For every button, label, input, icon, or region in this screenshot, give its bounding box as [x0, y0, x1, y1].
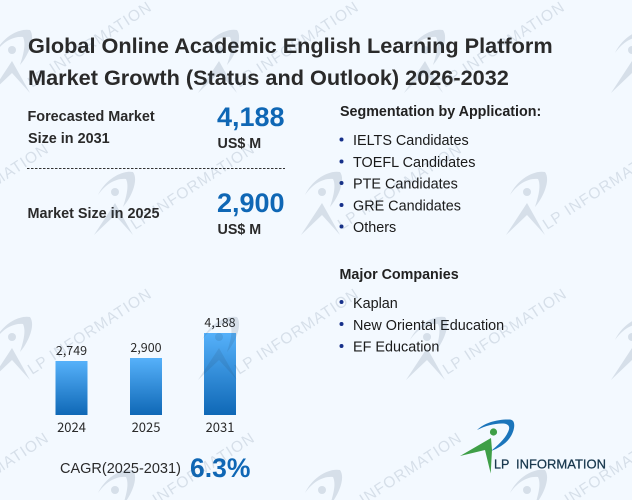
segmentation list: PTE Candidates: [353, 176, 458, 192]
segmentation list: IELTS Candidates: [353, 133, 469, 149]
segmentation list: GRE Candidates: [353, 198, 461, 214]
panel: segmentation by application: [340, 104, 541, 236]
text: LP INFORMATION: [25, 285, 155, 378]
bar 2031: [204, 312, 236, 436]
companies list: [340, 296, 504, 356]
logo: LP Information: [460, 419, 606, 474]
forecasted market size value: 4,188: [217, 102, 285, 132]
CAGR callout: [60, 453, 250, 483]
bar 2024: 2,749: [56, 340, 87, 359]
logo wordmark: INFORMATION: [516, 458, 606, 472]
bar 2024: [56, 340, 88, 436]
text: LP INFORMATION: [335, 140, 465, 233]
title: Global Online Academic English Learning Platform: [28, 33, 553, 58]
text: LP INFORMATION: [232, 0, 362, 91]
bar 2031: 2031: [206, 417, 234, 436]
bar chart: [56, 312, 236, 436]
segmentation heading: Segmentation by Application:: [340, 104, 541, 120]
text: LP INFORMATION: [440, 285, 570, 378]
companies list: EF Education: [353, 340, 439, 356]
panel: market size stats: [27, 102, 285, 238]
forecasted market size value: US$ M: [218, 136, 261, 152]
text: LP INFORMATION: [128, 140, 258, 233]
bar 2025: [130, 337, 162, 436]
CAGR callout: CAGR(2025-2031): [60, 461, 181, 477]
icon: logo dot: [490, 428, 497, 436]
forecasted market size label: Size in 2031: [28, 131, 110, 147]
title: [28, 33, 553, 90]
bar 2025: 2025: [132, 417, 160, 436]
logo wordmark: LP: [494, 458, 509, 472]
forecasted market size value: [217, 102, 285, 152]
market size 2025 value: US$ M: [218, 222, 261, 238]
segmentation list: Others: [353, 220, 396, 236]
text: LP INFORMATION: [438, 0, 568, 91]
segmentation list: TOEFL Candidates: [353, 155, 475, 171]
forecasted market size label: Forecasted Market: [28, 109, 155, 125]
panel: major companies: [340, 267, 504, 356]
companies list: Kaplan: [353, 296, 398, 312]
forecasted market size label: [28, 109, 155, 147]
icon: logo arc: [477, 419, 514, 451]
text: LP INFORMATION: [232, 285, 362, 378]
CAGR callout: 6.3%: [190, 453, 250, 483]
companies heading: Major Companies: [340, 267, 459, 283]
market size 2025 label: Market Size in 2025: [28, 206, 159, 222]
icon: logo arrow: [460, 438, 492, 474]
companies list: New Oriental Education: [353, 318, 504, 334]
bar 2031: 4,188: [204, 312, 236, 331]
text: LP INFORMATION: [25, 0, 155, 91]
bar 2025: 2,900: [130, 337, 162, 356]
title: Market Growth (Status and Outlook) 2026-2032: [28, 65, 509, 90]
bar 2024: 2024: [57, 417, 86, 436]
market size 2025 value: 2,900: [217, 188, 285, 218]
segmentation list: [340, 133, 475, 236]
market size 2025 value: [217, 188, 285, 238]
